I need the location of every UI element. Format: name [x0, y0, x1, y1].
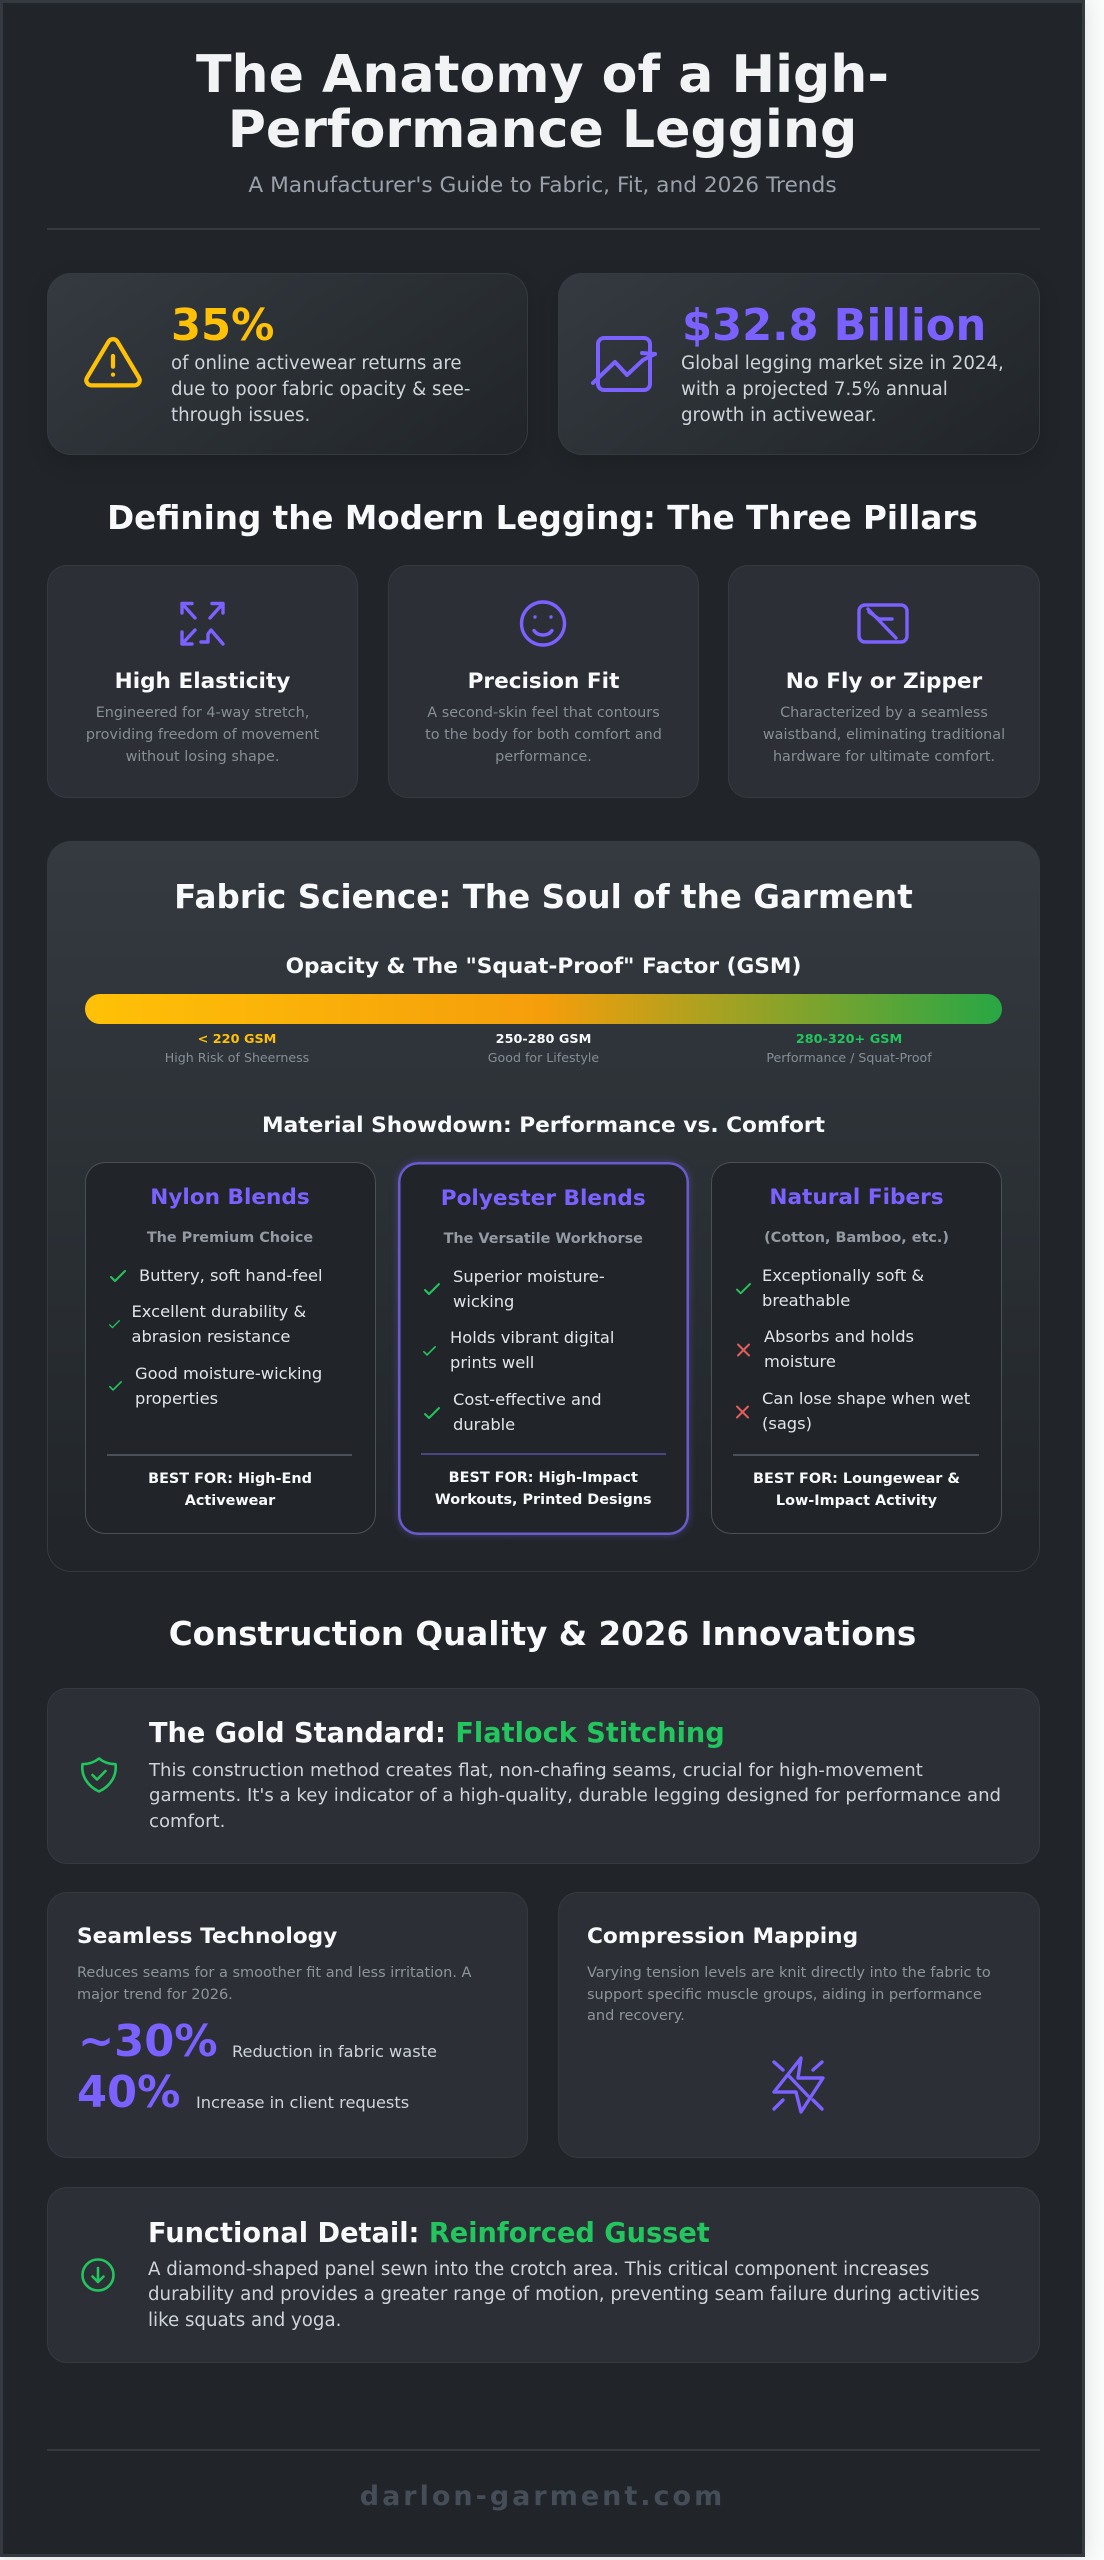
card text: like squats and yoga. [148, 2310, 341, 2331]
icon: warning triangle [84, 337, 142, 388]
list item [762, 1389, 970, 1433]
pillar text [425, 705, 662, 765]
heading: construction: Construction Quality & 2026 Innovations [169, 1615, 916, 1653]
icon: smiley [520, 600, 566, 647]
card text: support specific muscle groups, aiding in performance [587, 1987, 982, 2003]
stat: waste reduction: ~30% [78, 2017, 218, 2067]
icon: check [109, 1320, 120, 1328]
pillar text: Characterized by a seamless [780, 705, 988, 721]
card text [77, 1965, 472, 2003]
card text: This construction method creates flat, non-chafing seams, crucial for high-movement [149, 1760, 923, 1781]
gsm label: mid [488, 1032, 599, 1065]
card title: The Gold Standard: Flatlock Stitching [149, 1718, 725, 1749]
card text: durability and provides a greater range of motion, preventing seam failure during activities [148, 2284, 980, 2305]
pillar text [763, 705, 1005, 765]
panel: high elasticity [47, 565, 358, 798]
card title: Nylon Blends [150, 1184, 310, 1210]
card: nylon blends [84, 1162, 376, 1534]
stat text: of online activewear returns are [171, 353, 462, 374]
best for: Low-Impact Activity [776, 1493, 937, 1509]
gsm label: high: Performance / Squat-Proof [766, 1050, 932, 1065]
list item: Good moisture-wicking [135, 1364, 322, 1383]
panel: flatlock stitching [47, 1688, 1040, 1864]
best for [148, 1471, 312, 1509]
stat text [681, 353, 1004, 426]
panel: seamless technology [47, 1892, 528, 2158]
stat text: Global legging market size in 2024, [681, 353, 1004, 374]
icon: check [423, 1346, 436, 1356]
pillar text: without losing shape. [126, 749, 279, 765]
best for [435, 1470, 652, 1508]
list item: properties [135, 1389, 218, 1408]
list item: Holds vibrant digital [450, 1328, 614, 1347]
footer: website: darlon-garment.com [360, 2481, 725, 2512]
list item: Excellent durability & [132, 1302, 306, 1321]
card title: Functional Detail: Reinforced Gusset [148, 2218, 710, 2249]
list item [762, 1266, 924, 1310]
icon: check [109, 1381, 122, 1391]
card text [148, 1760, 1001, 1832]
best for: Activewear [185, 1493, 275, 1509]
gsm label: low: < 220 GSM [198, 1032, 276, 1047]
card title: Polyester Blends [441, 1186, 646, 1210]
list item: Cost-effective and [453, 1390, 602, 1409]
stat text: due to poor fabric opacity & see- [171, 379, 470, 400]
pillar text: A second-skin feel that contours [427, 705, 660, 721]
list item: abrasion resistance [132, 1327, 290, 1346]
list item: (sags) [762, 1414, 812, 1433]
card title: Compression Mapping [587, 1924, 858, 1949]
panel: stat market size [558, 273, 1040, 455]
icon: shield check [80, 1757, 117, 1793]
card text [587, 1965, 991, 2024]
best for: BEST FOR: Loungewear & [753, 1471, 960, 1487]
card text: comfort. [149, 1811, 225, 1832]
pillar text: Engineered for 4-way stretch, [96, 705, 309, 721]
icon: down arrow circle [81, 2258, 115, 2292]
gsm label: low [165, 1032, 309, 1065]
gsm label: high [766, 1032, 932, 1065]
panel: no fly or zipper [728, 565, 1040, 798]
list item [450, 1328, 614, 1372]
list item [453, 1390, 602, 1434]
heading: fabric science: Fabric Science: The Soul of the Garment [174, 878, 913, 916]
card text: major trend for 2026. [77, 1987, 233, 2003]
gsm label: high: 280-320+ GSM [796, 1032, 902, 1047]
list item: Exceptionally soft & [762, 1266, 924, 1285]
icon: check [424, 1283, 440, 1295]
best for [753, 1471, 960, 1509]
list item: prints well [450, 1353, 534, 1372]
stat label: Reduction in fabric waste [232, 2042, 437, 2061]
card subtitle: The Premium Choice [147, 1230, 313, 1246]
panel: compression mapping [558, 1892, 1040, 2158]
best for: Workouts, Printed Designs [435, 1492, 652, 1508]
pillar text: to the body for both comfort and [425, 727, 662, 743]
card subtitle: The Versatile Workhorse [444, 1231, 643, 1247]
stat text: through issues. [171, 405, 310, 426]
stat text: growth in activewear. [681, 405, 877, 426]
list item: Absorbs and holds [764, 1327, 914, 1346]
card text: Reduces seams for a smoother fit and less irritation. A [77, 1965, 471, 1981]
list item: Superior moisture- [453, 1267, 605, 1286]
heading: three pillars: Defining the Modern Legging: The Three Pillars [107, 499, 978, 537]
panel: fabric science [47, 841, 1040, 1572]
title [196, 44, 889, 160]
pillar title: Precision Fit [468, 668, 619, 694]
icon: growth chart [590, 336, 658, 392]
pillar text: hardware for ultimate comfort. [773, 749, 995, 765]
stat text [171, 353, 470, 426]
card: natural fibers [711, 1162, 1002, 1534]
gsm label: low: High Risk of Sheerness [165, 1050, 309, 1065]
pillar text: performance. [495, 749, 592, 765]
card text: A diamond-shaped panel sewn into the crotch area. This critical component increases [148, 2259, 929, 2280]
stat label: Increase in client requests [196, 2093, 409, 2112]
card title: Natural Fibers [769, 1184, 944, 1210]
list item [453, 1267, 605, 1311]
icon: expand arrows [180, 602, 225, 646]
list item: breathable [762, 1291, 850, 1310]
gsm label: mid: Good for Lifestyle [488, 1050, 599, 1065]
icon: check [110, 1270, 126, 1282]
subheading: material showdown: Material Showdown: Performance vs. Comfort [262, 1113, 825, 1138]
pillar text: providing freedom of movement [86, 727, 319, 743]
card text: garments. It's a key indicator of a high-quality, durable legging designed for performance and [149, 1785, 1001, 1806]
panel: precision fit [388, 565, 699, 798]
icon: cross [737, 1344, 750, 1356]
list item: Buttery, soft hand-feel [139, 1266, 323, 1285]
icon: check [736, 1283, 751, 1294]
best for: BEST FOR: High-End [148, 1471, 312, 1487]
pillar text [86, 705, 319, 765]
gsm label: mid: 250-280 GSM [496, 1032, 591, 1047]
panel: stat 35% returns [47, 273, 528, 455]
gsm gradient bar [84, 994, 1002, 1024]
card text [148, 2257, 980, 2333]
card text: Varying tension levels are knit directly into the fabric to [587, 1965, 991, 1981]
list item: moisture [764, 1352, 836, 1371]
list item [132, 1302, 306, 1346]
pillar title: High Elasticity [115, 668, 290, 694]
pillar title: No Fly or Zipper [786, 668, 982, 694]
card subtitle: (Cotton, Bamboo, etc.) [764, 1230, 949, 1246]
subtitle: A Manufacturer's Guide to Fabric, Fit, and 2026 Trends [248, 172, 837, 198]
list item: Can lose shape when wet [762, 1389, 970, 1408]
list item: durable [453, 1415, 515, 1434]
list item [135, 1364, 322, 1408]
title: The Anatomy of a High- [196, 44, 889, 104]
panel: reinforced gusset [47, 2187, 1040, 2363]
title: Performance Legging [228, 100, 857, 160]
icon: compression bolt [772, 2056, 825, 2114]
stat number: 35% [171, 301, 274, 351]
list item: wicking [453, 1292, 514, 1311]
icon: no zipper [857, 603, 909, 644]
card: polyester blends [398, 1162, 689, 1534]
list item [764, 1327, 914, 1371]
icon: check [424, 1407, 440, 1419]
stat text: with a projected 7.5% annual [681, 379, 948, 400]
card title: Seamless Technology [77, 1924, 337, 1949]
card text: and recovery. [587, 2008, 685, 2024]
pillar text: waistband, eliminating traditional [763, 727, 1005, 743]
stat: client requests: 40% [77, 2068, 180, 2118]
best for: BEST FOR: High-Impact [449, 1470, 638, 1486]
stat number: $32.8 Billion [682, 301, 986, 351]
subheading: opacity: Opacity & The "Squat-Proof" Factor (GSM) [286, 954, 801, 979]
icon: cross [736, 1406, 749, 1418]
